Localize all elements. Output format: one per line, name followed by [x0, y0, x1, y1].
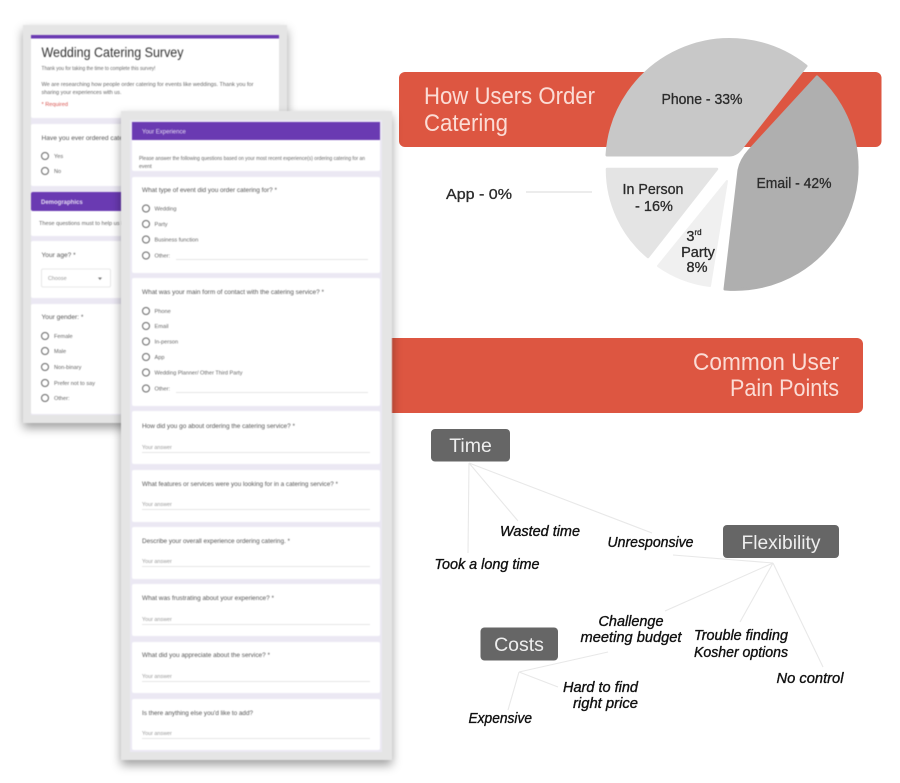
- card: how did you go about ordering question: How did you go about ordering the catering service? *: [142, 423, 295, 430]
- card: features or services question: Your answer: [142, 502, 172, 508]
- card: anything else question: Your answer: [142, 731, 172, 737]
- card: survey intro: * Required: [42, 102, 68, 108]
- pain points: connector lines: [468, 463, 823, 710]
- card: main form of contact question: Phone: [154, 309, 171, 315]
- heading: how users order catering: How Users Order: [424, 83, 595, 110]
- card: main form of contact question: App: [154, 355, 164, 361]
- card: ever ordered catering question: No: [54, 169, 61, 175]
- heading: common user pain points: Common User: [693, 349, 839, 376]
- card: appreciate question: Your answer: [142, 674, 172, 680]
- slice: email 42%: Email - 42%: [756, 176, 832, 192]
- card: main form of contact question: Other:: [154, 386, 170, 392]
- pain point: challenge meeting budget: meeting budget: [580, 630, 682, 646]
- pain point: challenge meeting budget: Challenge: [598, 614, 664, 630]
- card: demographics header: [31, 192, 279, 236]
- category: flexibility: [723, 525, 839, 558]
- card: features or services question: [132, 470, 380, 522]
- slice: phone 33%: [607, 40, 806, 155]
- card: survey intro: sharing your experiences with us.: [42, 90, 122, 96]
- category: time: Time: [449, 435, 492, 457]
- card: age question: Choose: [48, 276, 67, 282]
- card: main form of contact question: Wedding Planner/ Other Third Party: [154, 370, 243, 376]
- category: costs: Costs: [494, 634, 544, 656]
- card: type of event question: Wedding: [154, 206, 176, 212]
- card: survey intro: [31, 35, 279, 118]
- pain point: no control: No control: [776, 671, 844, 687]
- card: main form of contact question: What was your main form of contact with the catering service? *: [142, 289, 324, 296]
- card: frustrating question: Your answer: [142, 617, 172, 623]
- card: your experience header: event: [139, 164, 152, 170]
- card: gender question: Other:: [54, 396, 70, 402]
- slice: 3rd party 8%: 8%: [687, 260, 708, 276]
- card: how did you go about ordering question: Your answer: [142, 445, 172, 451]
- card: type of event question: Party: [154, 222, 168, 228]
- card: appreciate question: [132, 642, 380, 693]
- form screenshot: your experience: [121, 111, 392, 760]
- slice: in person 16%: - 16%: [635, 199, 673, 215]
- card: main form of contact question: In-person: [154, 340, 178, 346]
- pain point: took a long time: Took a long time: [434, 557, 540, 573]
- survey title: Wedding Catering Survey: [42, 44, 184, 60]
- pain point: unresponsive: Unresponsive: [608, 535, 694, 551]
- slice: in person 16%: In Person: [622, 182, 684, 198]
- card: overall experience question: [132, 527, 380, 579]
- card: gender question: Your gender: *: [42, 314, 84, 321]
- card: overall experience question: Your answer: [142, 559, 172, 565]
- slice: 3rd party 8%: rd: [694, 228, 702, 237]
- card: ever ordered catering question: Yes: [54, 154, 63, 160]
- card: survey intro: We are researching how people order catering for events like weddings. Thank you for: [42, 82, 254, 88]
- card: type of event question: What type of event did you order catering for? *: [142, 187, 277, 194]
- card: demographics header: Demographics: [41, 200, 83, 206]
- heading: how users order catering: Catering: [424, 110, 508, 137]
- card: your experience header: Your Experience: [142, 130, 186, 136]
- card: gender question: Prefer not to say: [54, 381, 95, 387]
- heading: common user pain points: Pain Points: [730, 375, 839, 402]
- card: type of event question: Business function: [154, 238, 198, 244]
- banner: common user pain points: [370, 338, 863, 413]
- card: type of event question: Other:: [154, 254, 170, 260]
- pain point: trouble finding kosher options: Kosher options: [694, 645, 788, 661]
- card: anything else question: Is there anything else you'd like to add?: [142, 710, 253, 717]
- card: appreciate question: What did you appreciate about the service? *: [142, 652, 270, 659]
- pain point: hard to find right price: right price: [573, 696, 638, 712]
- slice: 3rd party 8%: [658, 181, 727, 286]
- category: costs: [480, 628, 558, 660]
- card: overall experience question: Describe your overall experience ordering catering. *: [142, 538, 290, 545]
- card: age question: Your age? *: [42, 252, 76, 259]
- pain point: wasted time: Wasted time: [500, 524, 580, 540]
- card: frustrating question: [132, 584, 380, 636]
- slice: email 42%: [725, 77, 857, 289]
- slice: phone 33%: Phone - 33%: [662, 92, 743, 108]
- card: anything else question: [132, 699, 380, 750]
- label: app 0% with leader line: App - 0%: [446, 187, 512, 203]
- card: features or services question: What features or services were you looking for in a catering service? *: [142, 481, 338, 488]
- category: time: [431, 429, 510, 462]
- card: your experience header: [132, 122, 380, 171]
- slice: 3rd party 8%: Party: [681, 245, 716, 261]
- pain point: hard to find right price: Hard to find: [563, 680, 639, 696]
- slice: 3rd party 8%: 3: [686, 229, 694, 245]
- card: your experience header: Please answer the following questions based on your most recent experience(s) ordering catering for an: [139, 156, 365, 162]
- card: frustrating question: What was frustrating about your experience? *: [142, 595, 274, 602]
- card: gender question: Non-binary: [54, 365, 82, 371]
- pain point: expensive: Expensive: [468, 711, 532, 727]
- card: main form of contact question: [132, 278, 380, 406]
- card: type of event question: [132, 177, 380, 273]
- card: demographics header: These questions must to help us know: [39, 221, 135, 227]
- card: gender question: [31, 304, 279, 414]
- card: main form of contact question: Email: [154, 324, 168, 330]
- card: ever ordered catering question: Have you ever ordered catering?: [42, 135, 138, 142]
- card: age question: [31, 241, 279, 298]
- card: how did you go about ordering question: [132, 411, 380, 464]
- card: gender question: Male: [54, 349, 66, 355]
- pie chart: how users order: [446, 40, 857, 289]
- category: flexibility: Flexibility: [742, 532, 821, 554]
- slice: in person 16%: [607, 169, 717, 257]
- banner: how users order catering: [399, 72, 882, 147]
- card: survey intro: Thank you for taking the time to complete this survey!: [42, 66, 156, 72]
- pain point: trouble finding kosher options: Trouble finding: [694, 628, 788, 644]
- form screenshot: wedding catering survey: [23, 25, 287, 423]
- card: gender question: Female: [54, 334, 73, 340]
- card: ever ordered catering question: [31, 124, 279, 186]
